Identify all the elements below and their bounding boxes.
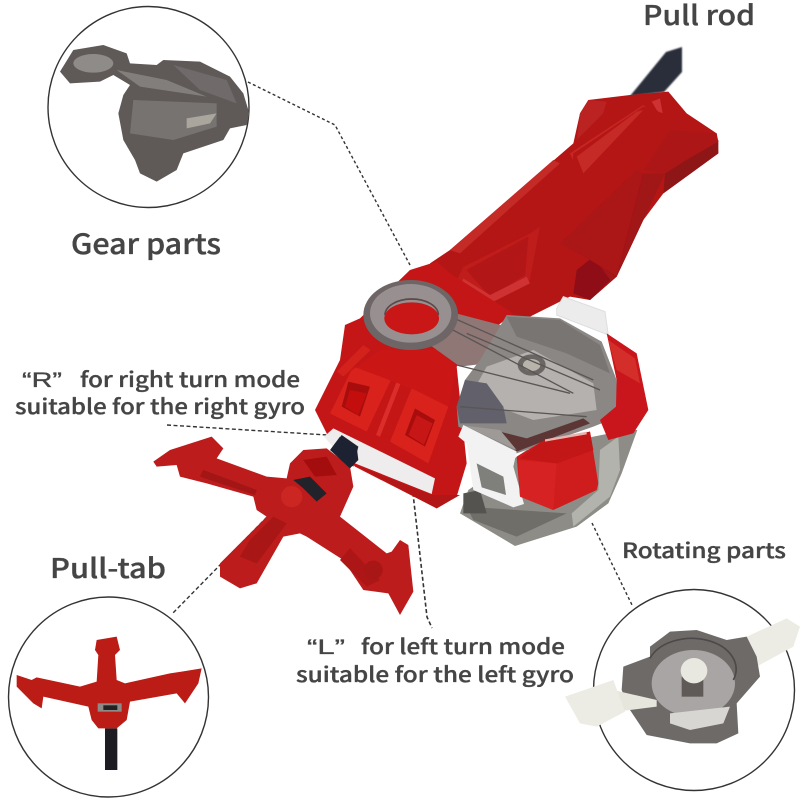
circle: rotating parts [565, 590, 800, 790]
label: L mode: suitable for the left gyro [296, 659, 574, 689]
dark nub [333, 435, 358, 467]
transparent arm [430, 310, 507, 367]
label: R mode: for right turn mode [80, 364, 300, 394]
label: pull-tab: Pull-tab [50, 547, 166, 586]
top white tab [557, 297, 608, 335]
pull-tab ripcord [153, 437, 413, 615]
launcher handle [430, 92, 718, 317]
label: gear parts: Gear parts [71, 223, 221, 263]
gear ring [363, 280, 458, 350]
label: R mode: “R” [22, 369, 62, 392]
launcher body [315, 262, 648, 546]
red main block [315, 262, 513, 508]
transparent gear cover [457, 315, 618, 453]
pull rod [630, 47, 682, 96]
stripes [368, 378, 410, 440]
red lower block [517, 432, 598, 510]
white underside [324, 428, 435, 494]
upper red face [343, 350, 457, 407]
rotating part piece [565, 618, 800, 743]
dashed leader: L mode [410, 467, 432, 628]
grey base plate [460, 430, 637, 546]
front panel 1 [330, 367, 392, 432]
label: L mode: “L” [307, 636, 345, 659]
label: L mode: for left turn mode [361, 631, 565, 661]
red right block [600, 333, 648, 440]
circle: pull-tab [8, 597, 208, 797]
front panel 2 [390, 388, 448, 463]
white clip [458, 425, 524, 507]
pull-tab piece [17, 637, 202, 770]
gear part piece [60, 45, 249, 182]
arm ridge lines [443, 315, 600, 417]
dashed leader: pull-tab [173, 517, 267, 613]
dashed leader: R mode [167, 425, 327, 435]
red bottom lip [355, 465, 460, 508]
dashed leader: rotating parts [592, 523, 633, 607]
circle: gear parts [48, 6, 249, 208]
label: R mode: suitable for the right gyro [15, 391, 305, 421]
dashed leader: gear parts [248, 82, 410, 265]
label: rotating parts: Rotating parts [622, 535, 786, 565]
